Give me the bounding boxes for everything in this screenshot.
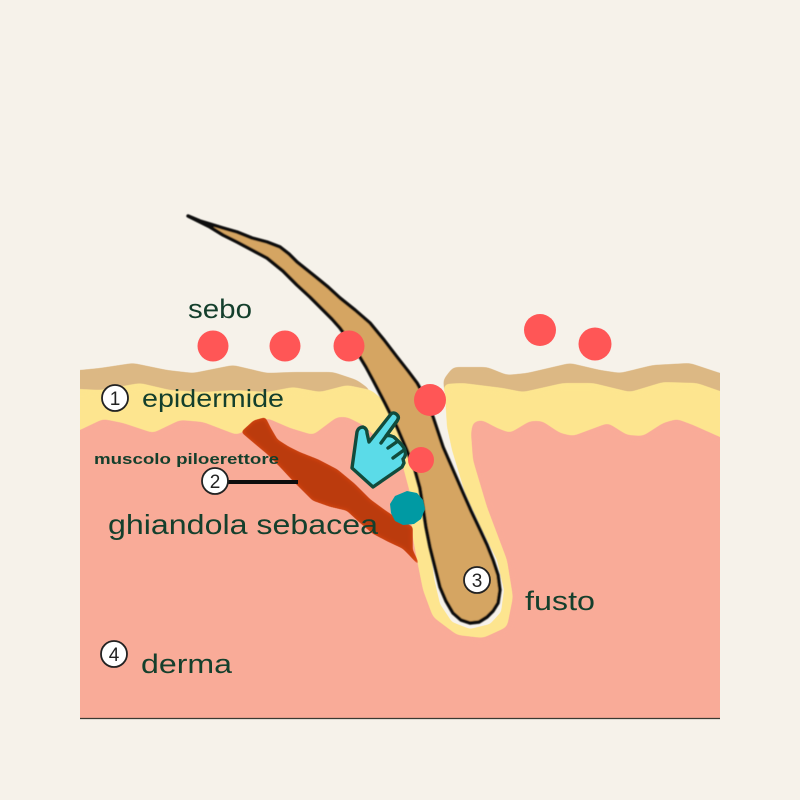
baseline of derma xyxy=(80,718,720,720)
label: epidermide: epidermide xyxy=(142,385,284,413)
hair shaft xyxy=(188,216,500,623)
label: muscolo piloerettore: muscolo piloerettore xyxy=(94,451,279,468)
sebum drops xyxy=(198,314,612,473)
drop 7 xyxy=(408,447,434,473)
tan outer layer left xyxy=(80,363,368,392)
label: fusto: fusto xyxy=(525,586,595,616)
derma layer xyxy=(80,417,720,718)
badge 1: 1 xyxy=(110,389,120,410)
icon: pointing hand xyxy=(352,413,405,487)
sebaceous gland muscle xyxy=(242,418,419,565)
drop 5 xyxy=(578,328,612,360)
badge 3 xyxy=(464,567,490,593)
badge 2: 2 xyxy=(210,472,220,493)
drop 3 xyxy=(334,330,364,362)
badge 4: 4 xyxy=(109,645,120,666)
teal marker xyxy=(390,491,425,525)
badge 1 xyxy=(102,385,128,411)
drop 1 xyxy=(198,330,228,362)
drop 2 xyxy=(270,330,300,362)
drop 4 xyxy=(524,314,556,346)
panel: skin cross-section xyxy=(80,363,720,718)
label: ghiandola sebacea: ghiandola sebacea xyxy=(108,509,378,540)
leader line 2 xyxy=(226,480,298,484)
drop 6 xyxy=(414,384,446,416)
label: derma: derma xyxy=(141,649,233,679)
follicle channel xyxy=(432,388,504,629)
badge 3: 3 xyxy=(472,571,482,592)
tan outer layer right xyxy=(443,363,720,392)
badge 2 xyxy=(202,468,228,494)
epidermis yellow layer xyxy=(80,382,720,638)
badge 4 xyxy=(101,641,127,667)
label: sebo: sebo xyxy=(188,294,252,324)
